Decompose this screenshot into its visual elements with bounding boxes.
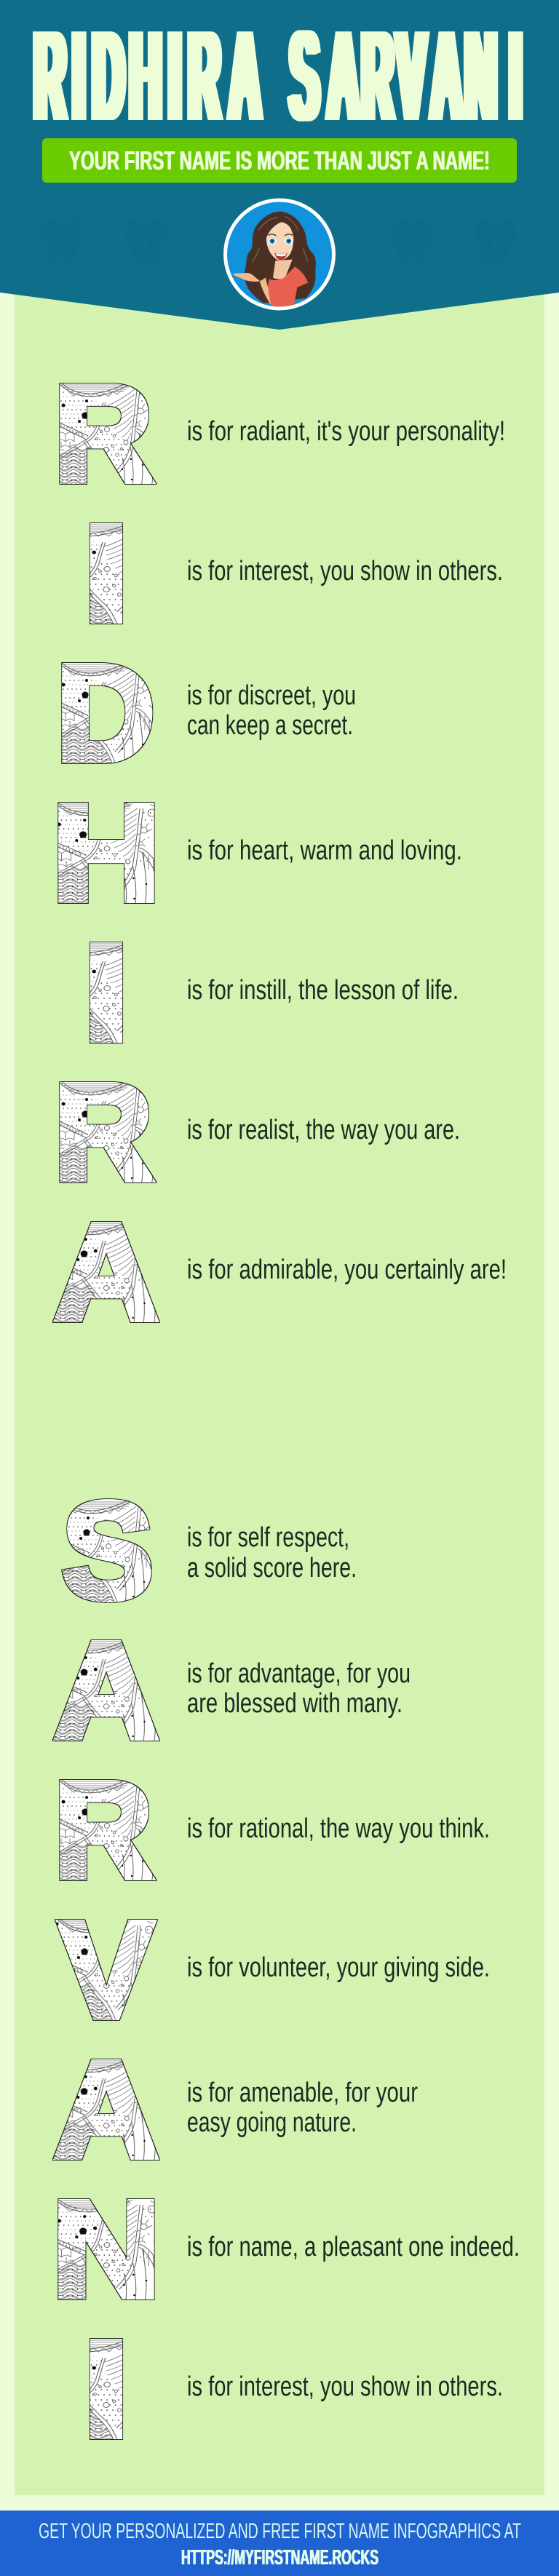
- row: S self respect: [63, 1476, 357, 1626]
- text: amenable: easy going nature.: [187, 2107, 357, 2138]
- row: R radiant: [55, 359, 505, 509]
- text: heart: is for heart, warm and loving.: [187, 835, 462, 866]
- row: I instill: [84, 917, 459, 1068]
- footer: [0, 2511, 559, 2576]
- letter S: S: [63, 1476, 153, 1626]
- letter A: A: [55, 2034, 158, 2185]
- letter R: R: [55, 1057, 152, 1208]
- text: advantage: [187, 1658, 411, 1719]
- row: D discreet: [57, 638, 356, 789]
- row: A advantage: [55, 1615, 411, 1766]
- letter R: R: [55, 359, 152, 509]
- text: amenable: [187, 2078, 418, 2138]
- text: self respect: a solid score here.: [187, 1553, 357, 1583]
- letter A: A: [55, 1615, 158, 1766]
- letter I: I: [84, 2313, 129, 2465]
- footer url: HTTPS://MYFIRSTNAME.ROCKS: [181, 2546, 378, 2569]
- text: amenable: is for amenable, for your: [187, 2078, 418, 2108]
- row: R rational: [55, 1755, 490, 1906]
- row: N name: [52, 2174, 520, 2325]
- text: instill: is for instill, the lesson of life.: [187, 975, 459, 1006]
- text: discreet: [187, 680, 356, 741]
- letter R: R: [55, 1755, 152, 1906]
- title: name: RIDHIRA: [34, 4, 261, 148]
- row: A amenable: [55, 2034, 418, 2185]
- text: advantage: is for advantage, for you: [187, 1658, 411, 1689]
- header banner: [0, 0, 559, 330]
- row: H heart: [52, 778, 462, 929]
- letter D: D: [57, 638, 154, 789]
- letter V: V: [60, 1895, 153, 2046]
- text: realist: is for realist, the way you are.: [187, 1115, 460, 1145]
- title: name: [34, 4, 522, 148]
- text: advantage: are blessed with many.: [187, 1688, 403, 1719]
- title: name: SARVANI: [290, 4, 522, 148]
- letter I: I: [84, 917, 129, 1068]
- text: discreet: can keep a secret.: [187, 710, 353, 741]
- text: self respect: [187, 1522, 357, 1583]
- row: I interest: [84, 2313, 503, 2465]
- row: A admirable: [55, 1196, 507, 1348]
- row: R realist: [55, 1057, 460, 1208]
- row: I interest: [84, 498, 503, 649]
- letter I: I: [84, 498, 129, 649]
- letter N: N: [52, 2174, 160, 2325]
- avatar badge: [223, 198, 336, 310]
- tagline bar: [42, 138, 517, 183]
- text: self respect: is for self respect,: [187, 1522, 349, 1553]
- row: V volunteer: [60, 1895, 490, 2046]
- text: discreet: is for discreet, you: [187, 680, 356, 711]
- letter H: H: [52, 778, 160, 929]
- letter A: A: [55, 1196, 158, 1348]
